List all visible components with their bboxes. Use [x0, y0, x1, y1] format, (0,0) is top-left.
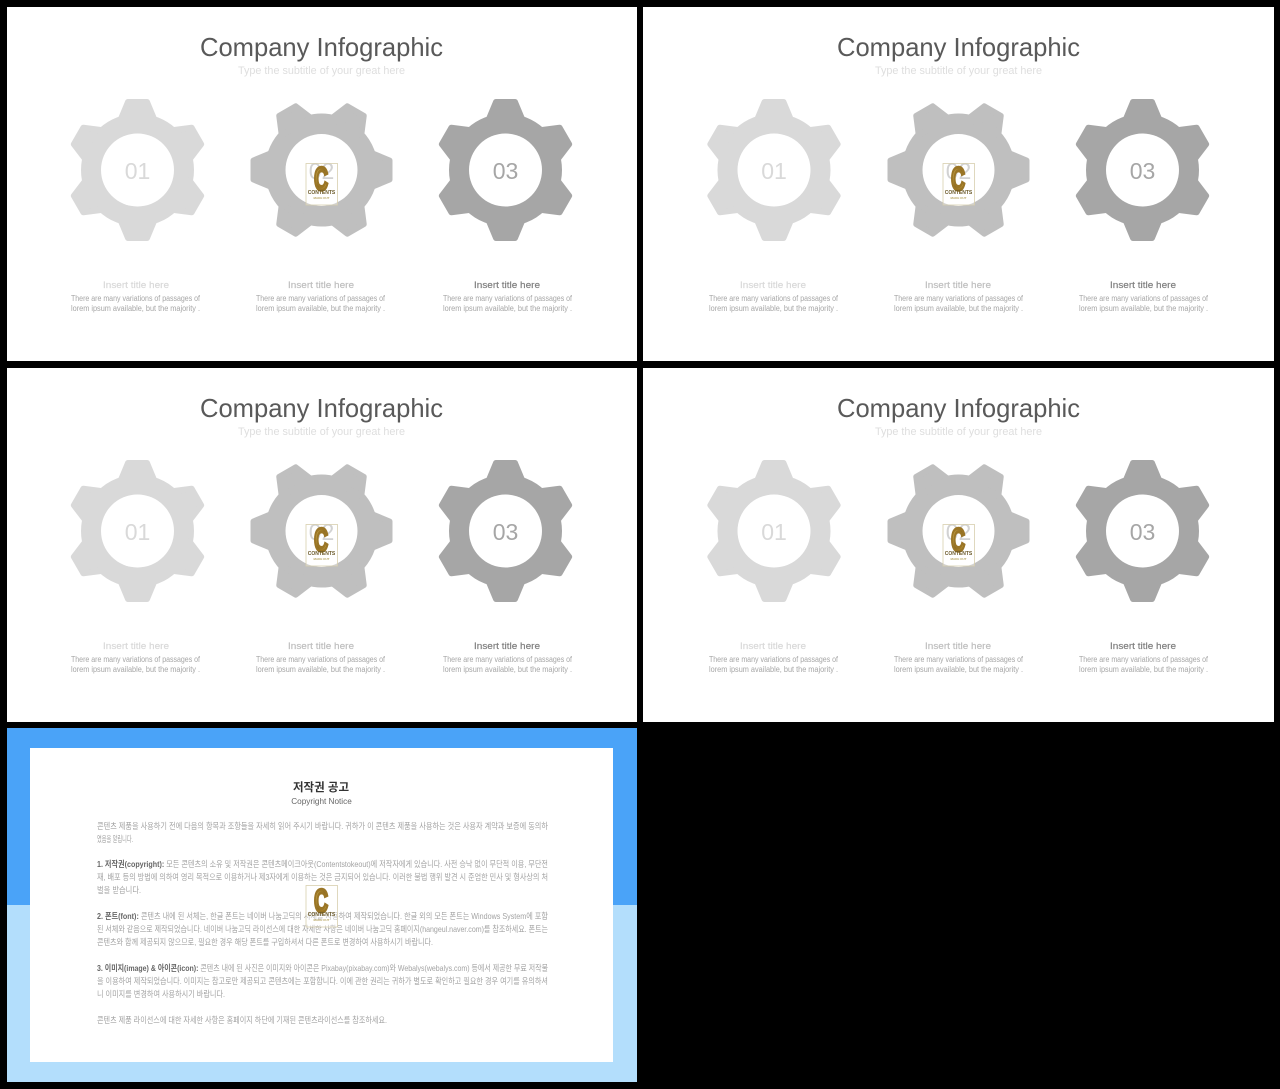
column 2 text: There are many variations of passages of [256, 655, 386, 664]
column 3 text [443, 641, 573, 674]
paragraph 3: image and icon: 을 이용하여 제작되었습니다. 이미지는 참고로만 제공되고 콘텐츠에는 포함합니다. 이에 관한 권리는 귀하가 별도로 확인하고 필요한 경우 여기를 유의하셔 [97, 976, 548, 986]
gear 01: 01 [761, 158, 787, 184]
column 2 text: Insert title here [288, 641, 354, 652]
paragraph 1: copyright [97, 859, 548, 895]
title: Company Infographic [837, 393, 1080, 423]
column 1 text [71, 280, 201, 313]
column 2 text: Insert title here [288, 280, 354, 291]
gear 03: 03 [493, 158, 518, 184]
column 2 text [894, 641, 1024, 674]
column 1 text: lorem ipsum available, but the majority . [71, 665, 200, 674]
column 1 text: Insert title here [103, 280, 169, 291]
column 1 text: There are many variations of passages of [71, 655, 201, 664]
paragraph 3: image and icon: 니 이미지를 변경하여 사용하시기 바랍니다. [97, 989, 225, 999]
gear 02: 02 [309, 158, 334, 184]
gear 03 [438, 102, 573, 238]
gear 01 [70, 102, 205, 238]
title: Company Infographic [837, 32, 1080, 62]
column 3 text: lorem ipsum available, but the majority . [443, 665, 572, 674]
logo watermark: MAKE OUT [950, 557, 967, 561]
column 1 text [709, 641, 839, 674]
gear 02 [229, 77, 414, 263]
column 1 text: Insert title here [740, 280, 806, 291]
subtitle: Type the subtitle of your great here [238, 426, 405, 438]
column 3 text [1079, 280, 1209, 313]
closing line: 콘텐츠 제품 라이선스에 대한 자세한 사항은 홈페이지 하단에 기재된 콘텐츠라이선스를 참조하세요. [97, 1015, 387, 1025]
column 1 text [71, 641, 201, 674]
gear 02: 02 [309, 519, 334, 545]
column 3 text: There are many variations of passages of [1079, 294, 1209, 303]
gear 01 [70, 463, 205, 599]
logo watermark [306, 522, 338, 566]
gear 01: 01 [125, 158, 150, 184]
column 3 text: lorem ipsum available, but the majority . [443, 304, 572, 313]
notice panel [30, 748, 613, 1062]
slide 3 [7, 368, 637, 722]
column 2 text: Insert title here [925, 641, 991, 652]
paragraph 2: font: 콘텐츠와 함께 제공되지 않으므로, 필요한 경우 해당 폰트를 구입하셔서 다른 폰트로 변경하여 사용하시기 바랍니다. [97, 937, 433, 947]
column 3 text [1079, 641, 1209, 674]
column 3 text: There are many variations of passages of [443, 294, 573, 303]
gear 02: 02 [946, 158, 971, 184]
paragraph 2: font: 2. 폰트(font): 콘텐츠 내에 된 서체는, 한글 폰트는 네이버 나눔고딕의 서체를 사용하여 제작되었습니다. 한글 외의 모든 폰트는 Windows System에 포함 [97, 911, 548, 921]
column 3 text: lorem ipsum available, but the majority . [1079, 665, 1208, 674]
gear 03 [1075, 463, 1210, 599]
column 1 text: Insert title here [103, 641, 169, 652]
logo watermark: MAKE OUT [314, 557, 330, 561]
logo watermark: C [314, 161, 328, 197]
column 3 text: Insert title here [1110, 280, 1176, 291]
column 2 text: There are many variations of passages of [894, 294, 1024, 303]
column 3 text [443, 280, 573, 313]
column 1 text: Insert title here [740, 641, 806, 652]
notice heading: 저작권 공고 [293, 780, 349, 794]
paragraph 3: image and icon: 3. 이미지(image) & 아이콘(icon): 콘텐츠 내에 된 사진은 이미지와 아이콘은 Pixabay(pixabay.com)와 Webalys(webalys.com) 등에서 제공한 무료 저작물 [97, 963, 548, 973]
column 3 text: There are many variations of passages of [1079, 655, 1209, 664]
gear 03: 03 [493, 519, 518, 545]
column 2 text [256, 280, 386, 313]
gear 03 [438, 463, 573, 599]
column 1 text [709, 280, 839, 313]
logo watermark: C [951, 161, 965, 197]
intro paragraph: 였음을 알립니다. [97, 834, 133, 844]
gear 01 [707, 463, 841, 599]
column 2 text: lorem ipsum available, but the majority . [894, 304, 1023, 313]
gear 01: 01 [125, 519, 150, 545]
paragraph 1: copyright: 1. 저작권(copyright): 모든 콘텐츠의 소유 및 저작권은 콘텐츠메이크아웃(Contentstokeout)에 저작자에게 있습니다. 사전 승낙 없이 무단적 이용, 무단전 [97, 859, 548, 869]
subtitle: Type the subtitle of your great here [238, 65, 405, 77]
column 1 text: There are many variations of passages of [709, 655, 839, 664]
logo watermark: C [951, 522, 965, 558]
column 3 text: Insert title here [474, 280, 540, 291]
logo watermark [306, 883, 338, 927]
intro paragraph: 콘텐츠 제품을 사용하기 전에 다음의 항목과 조항들을 자세히 읽어 주시기 바랍니다. 귀하가 이 콘텐츠 제품을 사용하는 것은 사용자 계약과 보증에 동의하 [97, 821, 548, 831]
paragraph 2: font: 된 서체와 같음으로 제작되었습니다. 네이버 나눔고딕 라이선스에 대한 자세한 사항은 네이버 나눔고딕 홈페이지(hangeul.naver.com)를 참조하세요. 폰트는 [97, 924, 548, 934]
logo watermark: CONTENTS [308, 190, 336, 196]
gear 03: 03 [1130, 519, 1155, 545]
logo watermark [943, 522, 974, 566]
column 3 text: Insert title here [474, 641, 540, 652]
logo watermark [306, 161, 338, 205]
column 3 text: Insert title here [1110, 641, 1176, 652]
gear 03 [1075, 102, 1210, 238]
column 2 text: There are many variations of passages of [894, 655, 1024, 664]
column 1 text: lorem ipsum available, but the majority . [709, 665, 838, 674]
gear 01: 01 [761, 519, 787, 545]
paragraph 3: image and icon [97, 963, 548, 999]
column 3 text: lorem ipsum available, but the majority . [1079, 304, 1208, 313]
column 1 text: lorem ipsum available, but the majority . [71, 304, 200, 313]
subtitle: Type the subtitle of your great here [875, 65, 1042, 77]
gear 02 [866, 438, 1051, 624]
column 2 text: There are many variations of passages of [256, 294, 386, 303]
slide 4 [643, 368, 1274, 722]
title: Company Infographic [200, 393, 443, 423]
column 2 text [894, 280, 1024, 313]
column 2 text [256, 641, 386, 674]
slide 5: copyright notice [7, 728, 637, 1082]
notice subheading: Copyright Notice [291, 797, 352, 806]
column 2 text: lorem ipsum available, but the majority . [894, 665, 1023, 674]
column 2 text: lorem ipsum available, but the majority . [256, 665, 385, 674]
logo watermark [943, 161, 974, 205]
gear 02: 02 [946, 519, 971, 545]
gear 03: 03 [1130, 158, 1155, 184]
paragraph 1: copyright: 재, 배포 등의 방법에 의하여 영리 목적으로 이용하거나 제3자에게 이용하는 것은 금지되어 있습니다. 이러한 불법 행위 발견 시 준엄한 민사 및 형사상의 처 [97, 872, 548, 882]
gear 02 [229, 438, 414, 624]
column 2 text: lorem ipsum available, but the majority . [256, 304, 385, 313]
logo watermark: CONTENTS [308, 912, 336, 918]
logo watermark: MAKE OUT [314, 918, 330, 922]
slide 1 [7, 7, 637, 361]
column 1 text: There are many variations of passages of [709, 294, 839, 303]
gear 02 [866, 77, 1051, 263]
logo watermark: MAKE OUT [950, 196, 967, 200]
gear 01 [707, 102, 841, 238]
logo watermark: CONTENTS [308, 551, 336, 557]
column 1 text: There are many variations of passages of [71, 294, 201, 303]
column 1 text: lorem ipsum available, but the majority . [709, 304, 838, 313]
logo watermark: CONTENTS [945, 551, 973, 557]
intro paragraph [97, 821, 548, 844]
paragraph 2: font [97, 911, 548, 947]
logo watermark: C [314, 883, 328, 919]
column 3 text: There are many variations of passages of [443, 655, 573, 664]
title: Company Infographic [200, 32, 443, 62]
logo watermark: CONTENTS [945, 190, 973, 196]
logo watermark: MAKE OUT [314, 196, 330, 200]
paragraph 1: copyright: 벌을 받습니다. [97, 885, 141, 895]
slide 2 [643, 7, 1274, 361]
column 2 text: Insert title here [925, 280, 991, 291]
logo watermark: C [314, 522, 328, 558]
subtitle: Type the subtitle of your great here [875, 426, 1042, 438]
